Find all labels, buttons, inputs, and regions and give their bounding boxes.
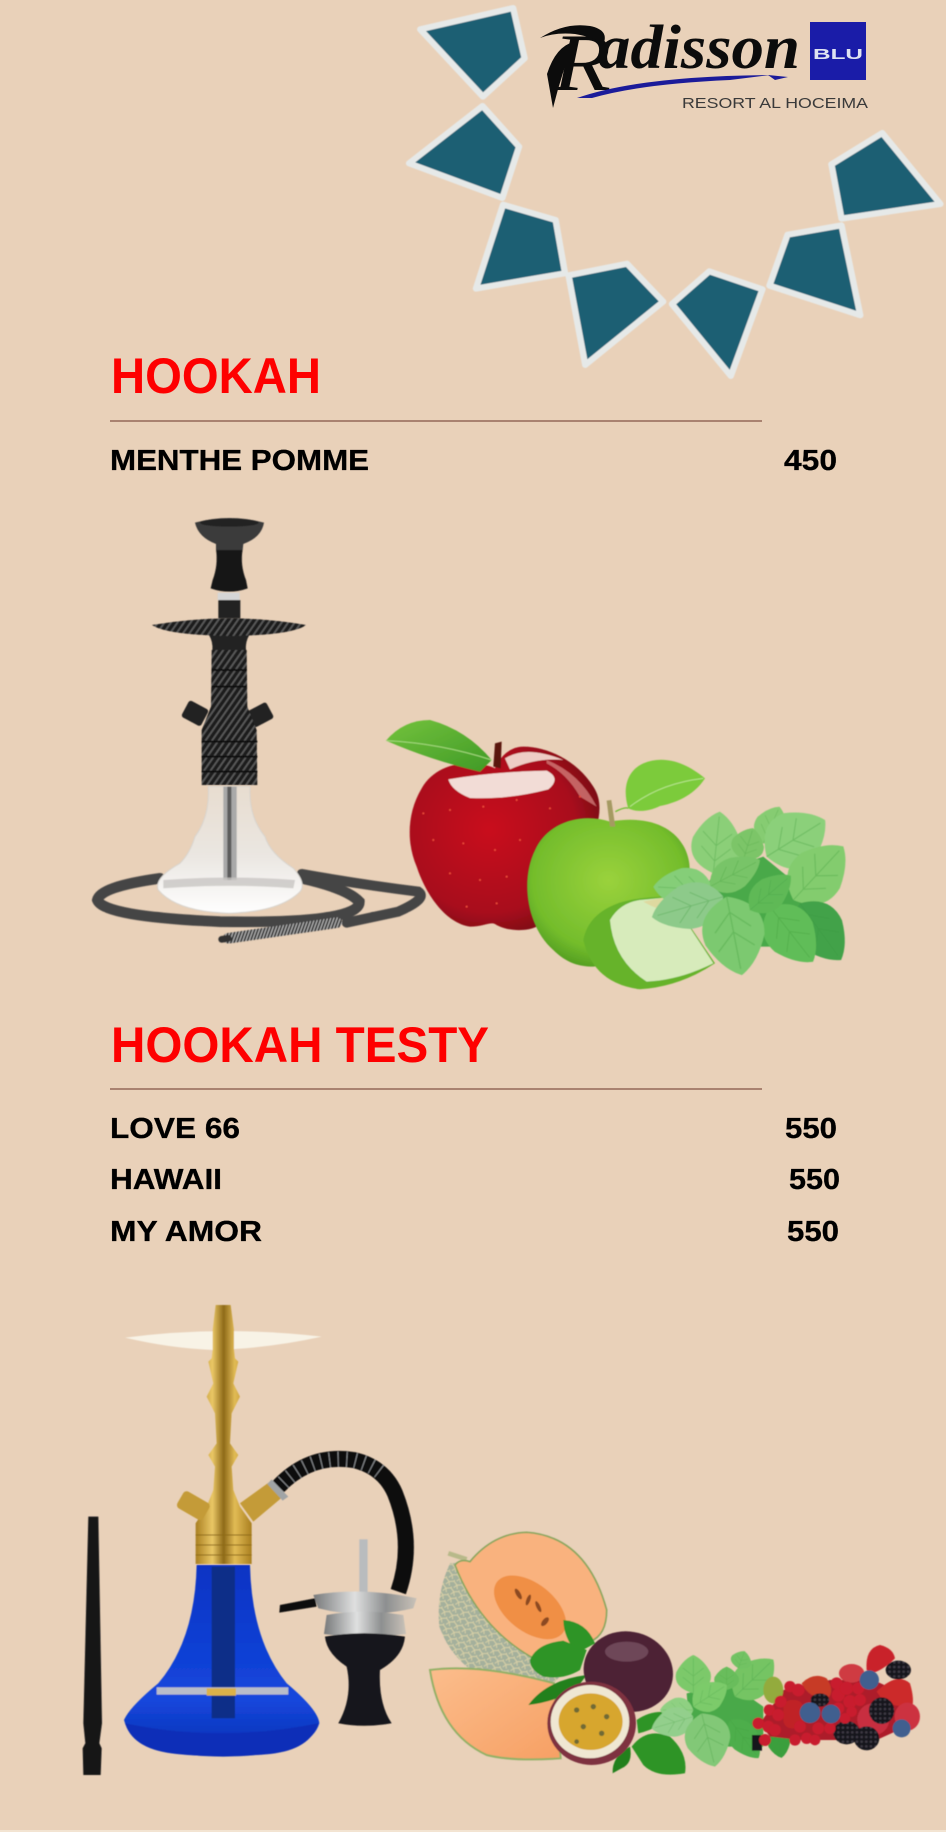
gold and blue hookah set (83, 1305, 417, 1775)
menu list: hookah testy: 550 (787, 1216, 839, 1248)
mint leaves (646, 796, 863, 981)
heading: hookah: HOOKAH (111, 348, 321, 404)
logo wordmark: R (552, 17, 611, 108)
logo blu badge: BLU (813, 46, 863, 63)
mouthpiece (83, 1517, 102, 1775)
dark leaves (528, 1620, 685, 1775)
apple leaf (386, 720, 492, 772)
menu item: menthe pomme (110, 445, 837, 477)
green leaf (626, 760, 705, 811)
apple slice (583, 897, 715, 989)
menu list: hookah testy: 550 (789, 1164, 840, 1196)
melon slice (430, 1668, 561, 1759)
menu list: hookah testy: LOVE 66 (110, 1113, 240, 1145)
logo swoosh (577, 75, 788, 98)
heading: hookah testy: HOOKAH TESTY (111, 1017, 489, 1073)
hose (278, 1459, 406, 1592)
stem (493, 742, 502, 768)
logo: Radisson Blu Resort Al Hoceima (540, 14, 868, 112)
carbon body (202, 650, 257, 785)
green apple and mint (527, 760, 863, 989)
berries (752, 1645, 920, 1751)
menu list: hookah testy (110, 1113, 840, 1248)
black hookah (97, 518, 421, 939)
menu list: hookah testy: 550 (785, 1113, 837, 1145)
logo blu badge (810, 22, 866, 80)
bowl (195, 518, 264, 550)
hose (97, 874, 421, 939)
menu item: menthe pomme: 450 (784, 445, 837, 477)
top stem (211, 549, 248, 592)
blue glass base (124, 1565, 319, 1757)
glass base (158, 787, 302, 913)
mint (687, 1683, 763, 1747)
bunting garland (409, 8, 940, 376)
passion fruit half (547, 1682, 636, 1765)
logo subtitle: RESORT AL HOCEIMA (682, 95, 868, 112)
menu list: hookah testy: HAWAII (110, 1164, 222, 1196)
ports (181, 700, 274, 728)
charcoal tray and bowl (359, 1539, 368, 1596)
logo wordmark (540, 14, 800, 108)
menu item: menthe pomme: MENTHE POMME (110, 445, 369, 477)
menu list: hookah testy: MY AMOR (110, 1216, 262, 1248)
melon, passion fruit, mint and berries (430, 1532, 920, 1775)
passion fruit whole (574, 1621, 682, 1722)
ports (175, 1490, 211, 1522)
logo wordmark: adisson (598, 14, 800, 82)
gold stem (196, 1305, 252, 1564)
red apple (386, 720, 599, 930)
melon half (439, 1562, 597, 1684)
foil plate (125, 1331, 322, 1350)
plate (152, 618, 306, 636)
